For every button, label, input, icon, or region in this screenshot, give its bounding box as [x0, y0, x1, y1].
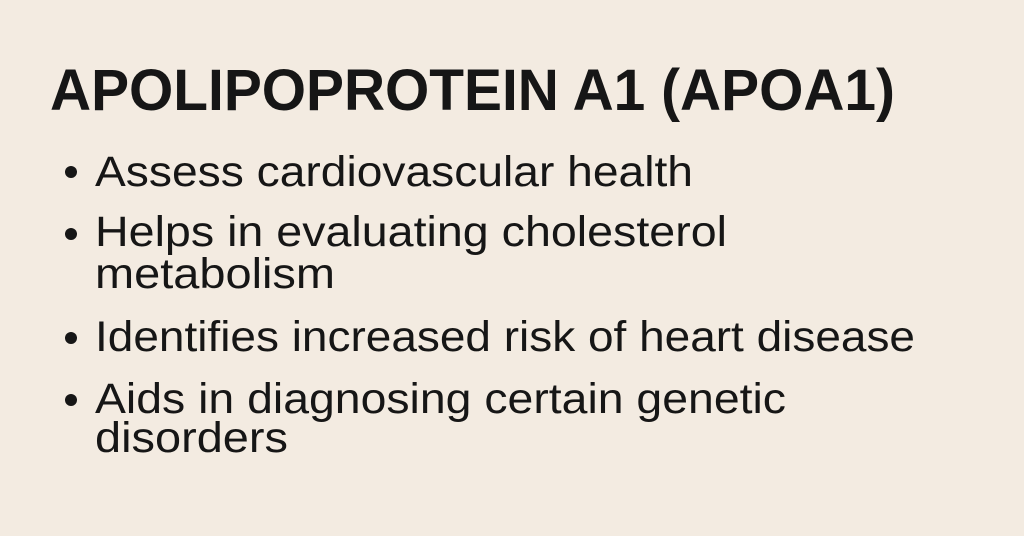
bullet list [65, 148, 915, 462]
bullet item: cardiovascular: Assess cardiovascular health [95, 148, 693, 196]
bullet item: genetic disorders: disorders [95, 414, 288, 462]
bullet item: genetic disorders [65, 375, 786, 462]
bullet item: cholesterol [65, 208, 727, 298]
title: APOLIPOPROTEIN A1 (APOA1) [50, 58, 895, 123]
bullet item: cholesterol: metabolism [95, 250, 335, 298]
bullet item: cholesterol: Helps in evaluating cholesterol [95, 208, 727, 256]
bullet item: heart disease: Identifies increased risk of heart disease [95, 313, 915, 361]
bullet item: genetic disorders: Aids in diagnosing certain genetic [95, 375, 786, 423]
